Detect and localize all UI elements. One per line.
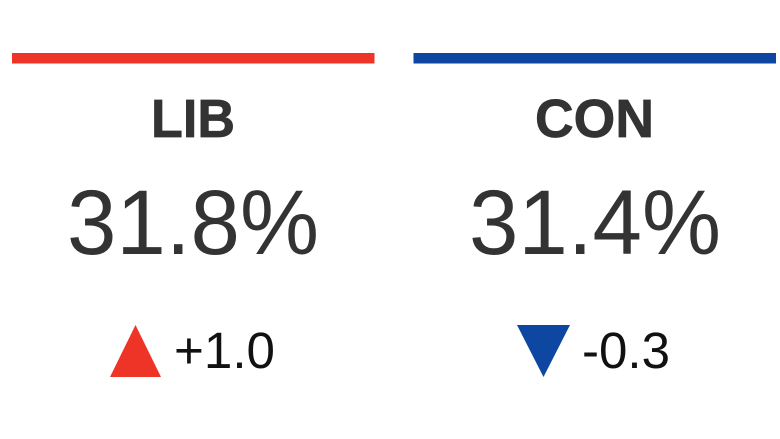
LIB percentage: 31.8% <box>67 172 319 274</box>
icon: red up triangle <box>110 325 161 377</box>
CON blue bar <box>414 53 776 64</box>
icon: blue down triangle <box>517 325 570 377</box>
LIB red bar <box>12 53 374 64</box>
panel: CON <box>414 53 776 379</box>
panel: LIB <box>12 53 374 379</box>
LIB change: +1.0 <box>174 322 275 379</box>
CON change: -0.3 <box>582 322 670 379</box>
CON heading: CON <box>535 89 654 149</box>
LIB heading: LIB <box>151 89 235 149</box>
CON percentage: 31.4% <box>469 172 721 274</box>
